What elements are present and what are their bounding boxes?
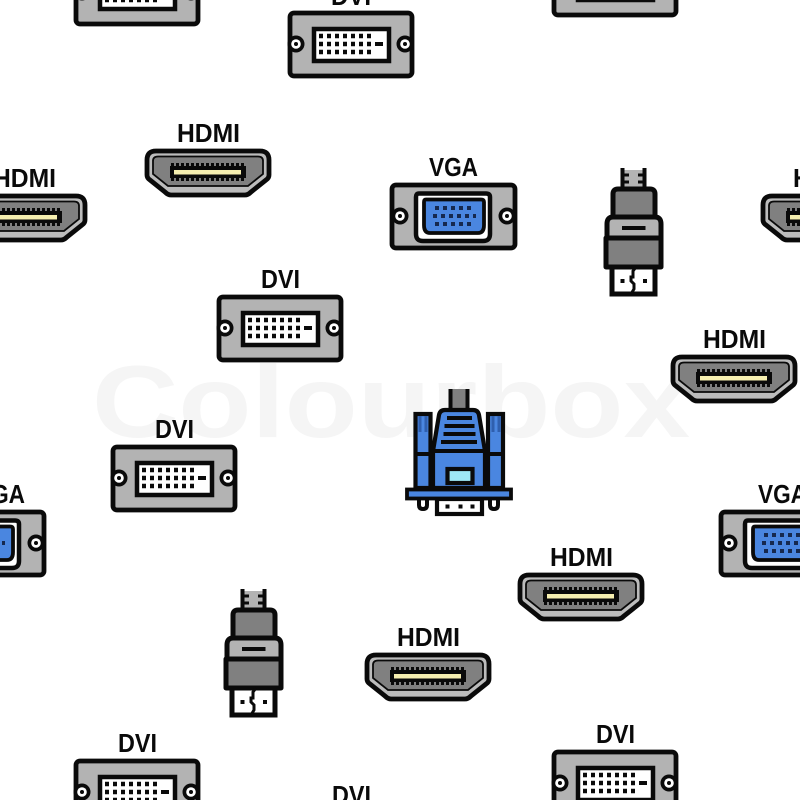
icon: cable plug upper right — [606, 168, 661, 294]
connector: HDMI left edge — [0, 163, 85, 240]
thumb screw right — [487, 414, 504, 488]
connector: DVI bottom left: DVI — [118, 728, 157, 758]
connector: DVI left — [110, 414, 236, 510]
connector: HDMI lower right — [520, 542, 642, 619]
connector: DVI centre: DVI — [261, 264, 300, 294]
connector: HDMI right — [673, 324, 795, 401]
connector: VGA upper centre: VGA — [429, 152, 478, 182]
watermark: Colourbox — [92, 345, 690, 459]
icon: cable plug lower left — [226, 589, 281, 715]
connector: DVI top left — [74, 0, 200, 24]
base plate — [407, 490, 511, 498]
connector: DVI top centre — [288, 0, 414, 76]
thumb screw left — [415, 414, 431, 488]
connector: DVI bottom right — [552, 719, 678, 800]
connector: DVI bottom right: DVI — [596, 719, 635, 749]
connector: HDMI lower centre — [367, 622, 489, 699]
connector: HDMI right edge — [763, 163, 800, 240]
connector: DVI centre — [216, 264, 342, 360]
connector: DVI left: DVI — [155, 414, 194, 444]
connector: DVI bottom left — [74, 728, 200, 800]
connector: HDMI lower centre: HDMI — [397, 622, 460, 652]
cable — [449, 389, 469, 410]
connector shell — [437, 499, 482, 514]
connector: HDMI upper left: HDMI — [177, 118, 240, 148]
connector: VGA right edge — [720, 479, 800, 575]
icon: VGA plug — [407, 389, 511, 514]
hood — [433, 410, 485, 488]
connector: HDMI right: HDMI — [703, 324, 766, 354]
connector: VGA left edge — [0, 479, 44, 575]
indicator window — [448, 469, 472, 483]
connector: HDMI upper left — [147, 118, 269, 195]
connector: HDMI lower right: HDMI — [550, 542, 613, 572]
connector: VGA upper centre — [392, 152, 516, 248]
connector: DVI top right — [552, 0, 678, 15]
screw tips — [419, 500, 498, 509]
